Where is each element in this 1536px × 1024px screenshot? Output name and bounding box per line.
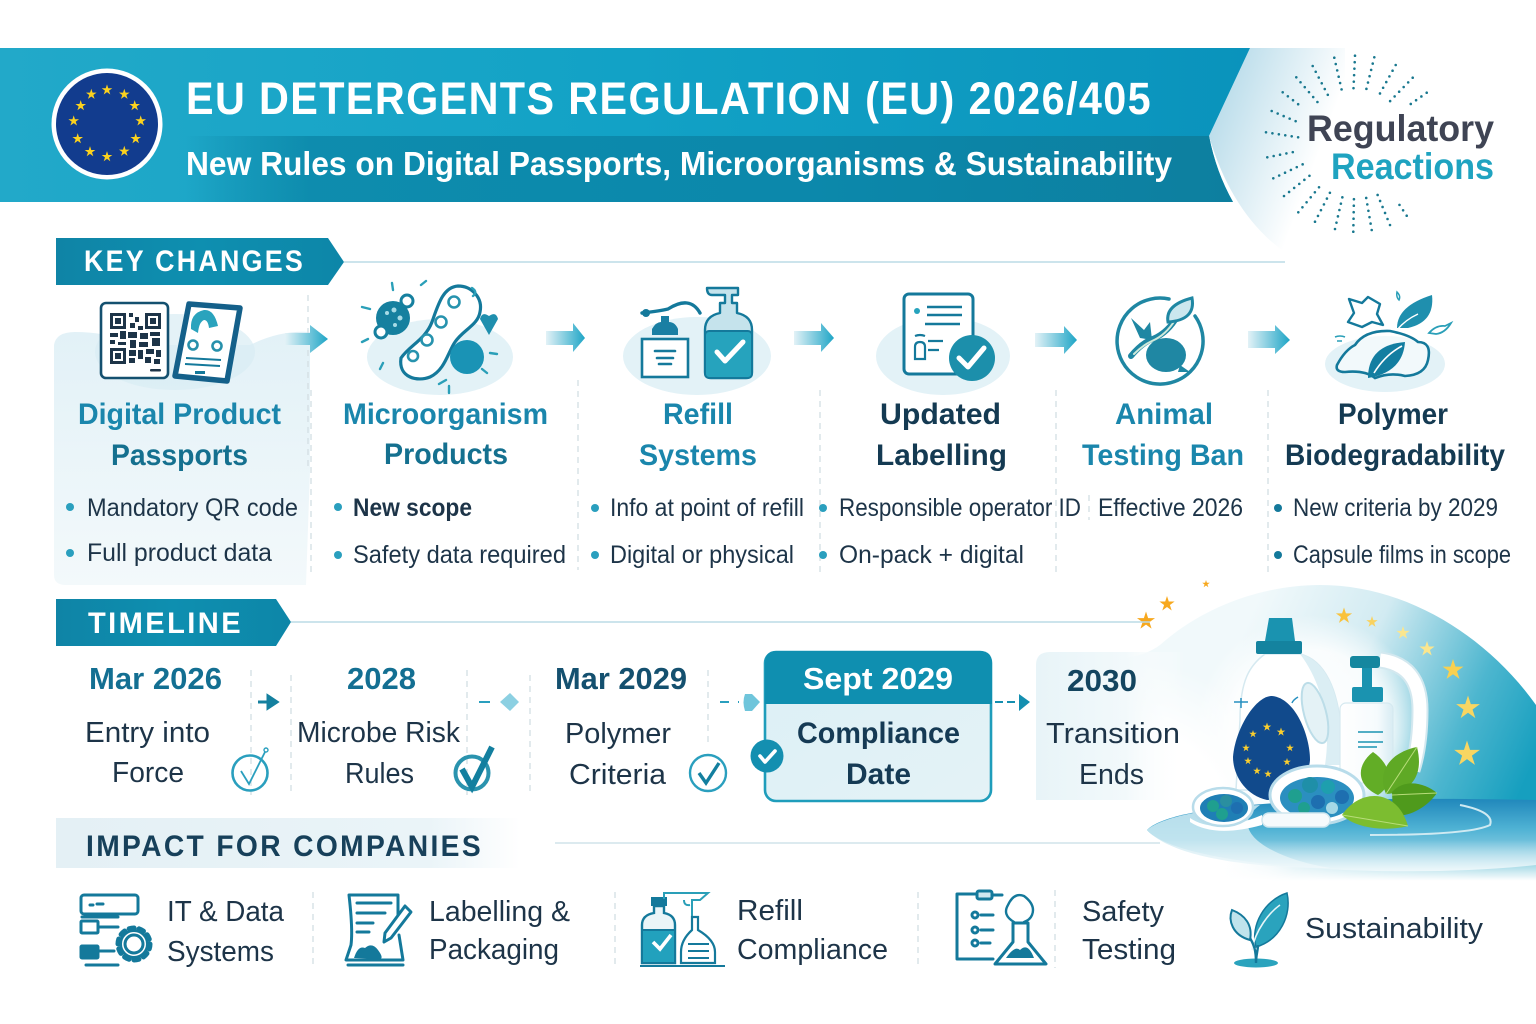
heading: Systems (639, 439, 757, 472)
connector arrow (995, 694, 1030, 711)
icon: check (690, 755, 726, 791)
icon: QR code and phone (101, 303, 240, 381)
heading (1082, 398, 1244, 472)
timeline: Mar 2029: Criteria (569, 759, 667, 791)
impact: refill compliance (640, 892, 918, 968)
connector arrow (258, 696, 277, 708)
heading: Microorganism (343, 398, 548, 431)
EU drop (1233, 696, 1310, 800)
timeline: Mar 2029: Mar 2029 (555, 661, 687, 696)
illustration: detergent bottles with EU drop (960, 580, 1536, 1000)
timeline: 2028: Microbe Risk (297, 717, 460, 749)
bullet text: Effective 2026 (1098, 494, 1243, 522)
bullets (591, 494, 804, 569)
bullets: Capsule films in scope (1293, 541, 1511, 569)
bullets (66, 494, 298, 567)
small bottle (1340, 656, 1420, 783)
heading: Refill (663, 398, 733, 431)
connector (720, 694, 760, 711)
arrow (1035, 326, 1077, 354)
logo: Regulatory Reactions: Reactions (1331, 146, 1494, 187)
timeline: Sept 2029 highlighted box (750, 651, 992, 801)
impact: sustainability: Sustainability (1305, 913, 1484, 945)
impact: IT and data systems (81, 892, 313, 968)
arrow (1248, 325, 1290, 354)
timeline: 2030: Ends (1079, 759, 1144, 791)
icon: microorganisms (362, 281, 498, 393)
icon: refill bottles (642, 288, 752, 378)
logo: Regulatory Reactions: Regulatory (1307, 108, 1494, 149)
impact: labelling and packaging: Packaging (429, 934, 559, 966)
title: EU DETERGENTS REGULATION (EU) 2026/405 (186, 73, 1152, 124)
timeline: 2030: Transition (1046, 718, 1180, 750)
icon: IT gear (81, 895, 150, 965)
heading: Products (384, 438, 508, 471)
icon: no animal testing (1117, 298, 1203, 384)
timeline: Sept 2029 highlighted box: Sept 2029 (803, 661, 953, 696)
impact: refill compliance: Compliance (737, 934, 888, 966)
impact: safety testing: Testing (1082, 934, 1176, 966)
timeline: 2030 (1036, 652, 1185, 800)
icon: EU flag (52, 68, 162, 180)
section heading: timeline (56, 599, 1150, 646)
timeline: Mar 2026: Mar 2026 (89, 661, 222, 696)
icon: sprout (1231, 893, 1288, 968)
timeline: 2028 (291, 661, 492, 795)
bullets: Info at point of refill (610, 494, 804, 522)
timeline: Sept 2029 highlighted box: Date (846, 758, 911, 791)
timeline: 2028: Rules (345, 758, 414, 790)
logo: Regulatory Reactions (1266, 56, 1494, 232)
stars (1137, 580, 1480, 765)
section heading: timeline: TIMELINE (88, 607, 243, 640)
impact: labelling and packaging (346, 892, 615, 968)
leaves (1342, 747, 1437, 829)
bullets: New criteria by 2029 (1293, 494, 1498, 522)
subtitle: New Rules on Digital Passports, Microorganisms & Sustainability (186, 145, 1173, 182)
arrow (794, 323, 834, 352)
timeline: 2028: 2028 (347, 661, 416, 696)
panel: logo glow (1209, 48, 1345, 262)
bullets: Mandatory QR code (87, 494, 298, 522)
heading: Polymer (1338, 398, 1448, 431)
heading: Digital Product (78, 398, 281, 431)
heading: Passports (111, 439, 248, 472)
icon: biodegradable polymer (1335, 292, 1451, 378)
arrow (285, 325, 328, 353)
panel: microorganism products (311, 281, 578, 575)
icon: label and pen (346, 895, 411, 965)
bullets: New scope (353, 494, 472, 522)
large bottle (1236, 618, 1341, 790)
panel: animal testing ban (1082, 298, 1268, 575)
section heading: impact for companies: IMPACT FOR COMPANIES (86, 830, 483, 863)
bullets (334, 494, 566, 569)
panel: refill systems (591, 288, 820, 575)
timeline: Mar 2029 (530, 661, 726, 795)
heading: Labelling (876, 439, 1007, 472)
bullets (1274, 494, 1511, 569)
impact: safety testing: Safety (1082, 896, 1164, 928)
section heading: key changes (56, 238, 1285, 285)
heading (78, 398, 281, 472)
heading: Testing Ban (1082, 439, 1244, 472)
panel: polymer biodegradability (1274, 292, 1511, 569)
impact: sustainability (1231, 893, 1484, 968)
icon: clipboard and flask (957, 891, 1046, 964)
impact: refill compliance: Refill (737, 895, 803, 927)
arrow (546, 323, 585, 352)
section heading: impact for companies (56, 818, 1160, 868)
impact: IT and data systems: Systems (167, 936, 274, 968)
timeline: Mar 2029: Polymer (565, 718, 671, 750)
bullets: Safety data required (353, 541, 566, 569)
bullets (819, 494, 1081, 569)
impact: IT and data systems: IT & Data (167, 896, 285, 928)
timeline: Sept 2029 highlighted box: Compliance (797, 717, 960, 750)
timeline: 2030: 2030 (1067, 663, 1137, 698)
bowls with microbes (1190, 766, 1364, 831)
heading (639, 398, 757, 472)
bullets: Responsible operator ID (839, 494, 1081, 522)
heading: Updated (880, 398, 1001, 431)
bullets: On-pack + digital (839, 541, 1024, 569)
panel: updated labelling (819, 294, 1081, 575)
heading: Biodegradability (1285, 439, 1505, 472)
connector diamond (479, 693, 519, 711)
icon: bold check (456, 747, 492, 790)
icon: document with check (904, 294, 995, 381)
bullets: Digital or physical (610, 541, 794, 569)
banner (0, 48, 1250, 202)
icon: check badge (750, 740, 784, 772)
icon: check (232, 748, 268, 790)
timeline: Mar 2026: Entry into (85, 717, 210, 749)
heading (343, 398, 548, 471)
bullets: Full product data (87, 539, 272, 567)
impact: safety testing (957, 890, 1176, 968)
impact: labelling and packaging: Labelling & (429, 896, 570, 928)
heading: Animal (1115, 398, 1213, 431)
timeline: Mar 2026: Force (112, 757, 184, 789)
heading (1285, 398, 1505, 472)
panel: digital product passports (54, 295, 310, 585)
heading (876, 398, 1007, 472)
section heading: key changes: KEY CHANGES (84, 245, 305, 278)
icon: refill bottles (640, 893, 725, 966)
timeline: Mar 2026 (85, 661, 268, 795)
